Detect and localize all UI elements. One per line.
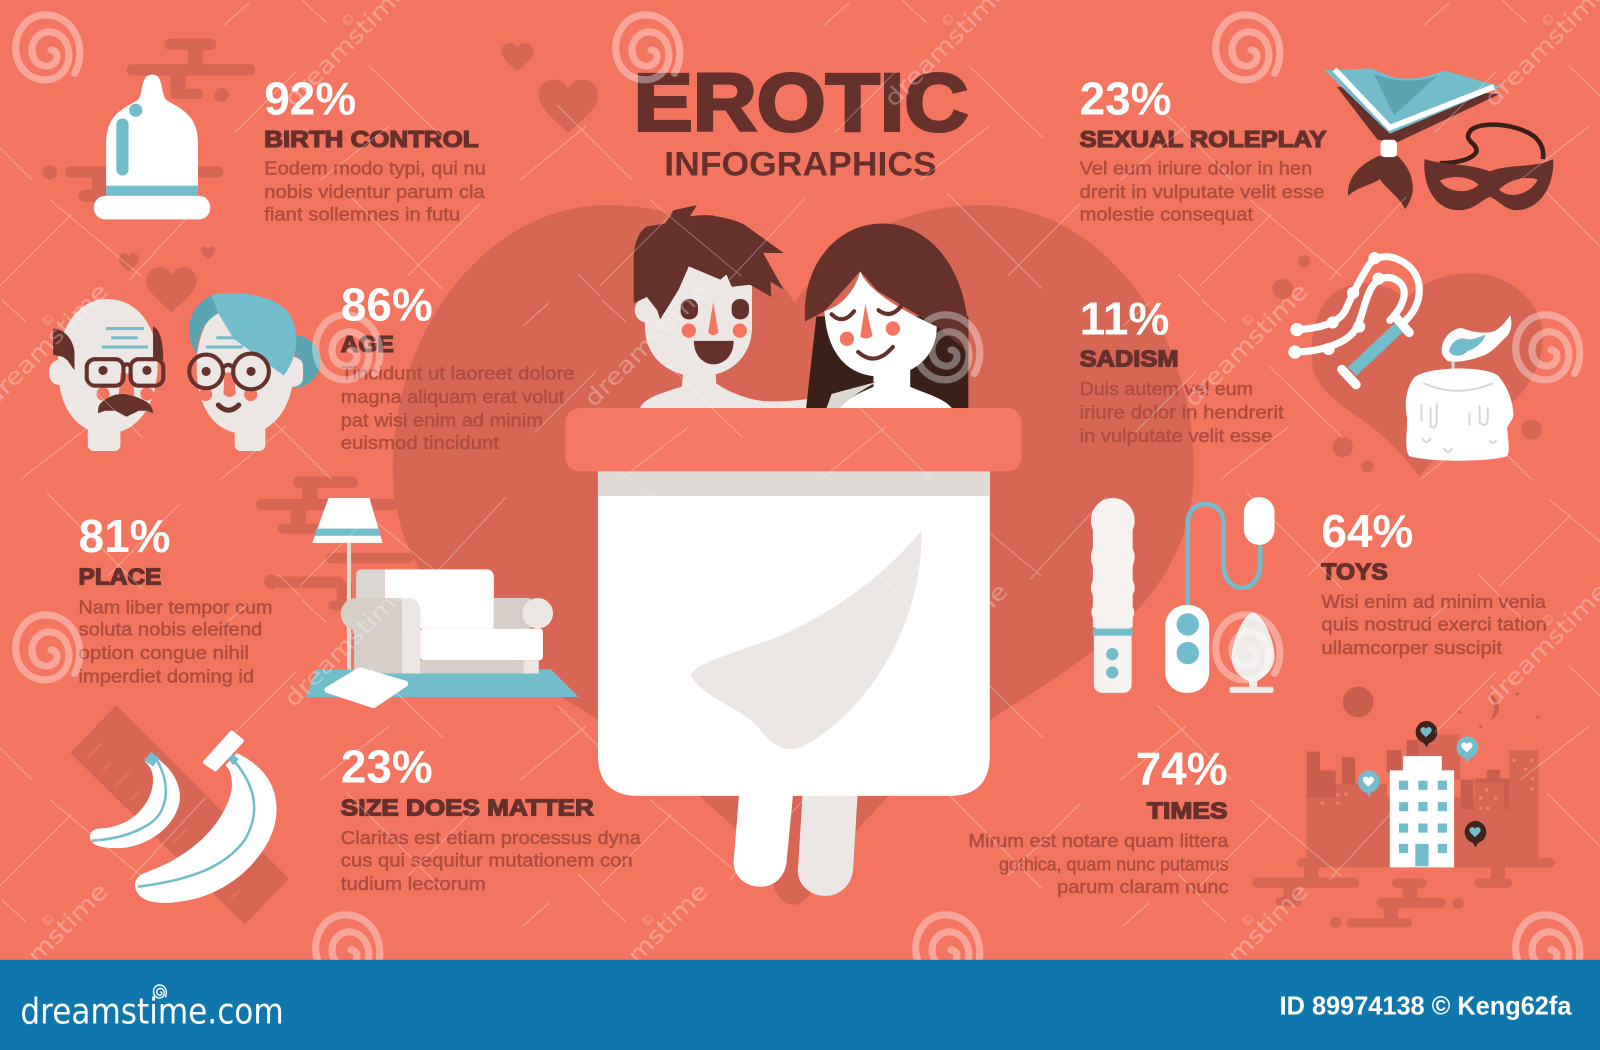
text: toys: TOYS — [1321, 559, 1388, 585]
text: age — [341, 278, 574, 453]
panel: times — [968, 687, 1555, 928]
text: sadism: SADISM — [1080, 345, 1179, 371]
text: sadism: Duis autem vel eum — [1080, 378, 1253, 399]
panel: birth control — [43, 39, 486, 224]
text: birth control — [264, 72, 486, 224]
text: place: imperdiet doming id — [79, 666, 254, 687]
text: toys — [1321, 505, 1547, 658]
watermark text: © — [339, 11, 359, 31]
panel: age — [49, 278, 574, 453]
watermark text: dreamstime — [1178, 877, 1314, 1012]
text: place: soluta nobis eleifend — [79, 619, 262, 640]
text: birth control: BIRTH CONTROL — [264, 126, 479, 152]
blanket — [565, 408, 1021, 796]
footer logo: dreamstime.com — [20, 991, 284, 1032]
text: place: Nam liber tempor cum — [79, 596, 272, 617]
text: sexual roleplay: molestie consequat — [1080, 203, 1254, 224]
text: age: 86% — [341, 278, 433, 330]
text: size does matter: tudium lectorum — [341, 873, 486, 894]
watermark text: © — [639, 911, 659, 931]
text: age: euismod tincidunt — [341, 432, 500, 453]
text: sexual roleplay: 23% — [1080, 72, 1171, 124]
text: birth control: nobis videntur parum cla — [264, 181, 485, 202]
panel: size does matter — [70, 705, 641, 924]
text: place: option congue nihil — [79, 642, 249, 663]
icon: night sky — [1343, 687, 1539, 728]
icon: condom — [43, 39, 255, 219]
text: sadism — [1080, 293, 1284, 446]
watermark text: © — [939, 11, 959, 31]
watermark text: dreamstime — [278, 577, 414, 712]
man — [634, 205, 847, 408]
icon: old man — [49, 299, 163, 451]
text: sexual roleplay: Vel eum iriure dolor in hen — [1080, 157, 1312, 178]
footer banner — [0, 960, 1600, 1050]
text: times: parum claram nunc — [1057, 876, 1229, 897]
text: sexual roleplay: drerit in vulputate velit esse — [1080, 181, 1324, 202]
text: sexual roleplay: SEXUAL ROLEPLAY — [1080, 126, 1327, 152]
text: sadism: iriure dolor in hendrerit — [1080, 401, 1284, 422]
watermark text: dreamstime — [878, 577, 1014, 712]
text: times: Mirum est notare quam littera — [968, 830, 1229, 851]
icon: teardrop toy — [1230, 612, 1275, 693]
text: size does matter: SIZE DOES MATTER — [341, 794, 594, 820]
panel: toys — [1091, 497, 1547, 693]
text: times: TIMES — [1147, 797, 1228, 823]
text: toys: ullamcorper suscipit — [1321, 637, 1503, 658]
watermark text: dreamstime — [1478, 577, 1600, 712]
text: toys: 64% — [1321, 505, 1413, 557]
watermark text: © — [39, 311, 59, 331]
text: birth control: 92% — [264, 72, 356, 124]
title: EROTIC — [634, 58, 968, 149]
panel: sexual roleplay — [1080, 68, 1553, 224]
small floating hearts — [118, 43, 598, 312]
text: sadism: 11% — [1080, 293, 1169, 345]
watermark text: © — [1239, 911, 1259, 931]
watermark text: © — [939, 611, 959, 631]
text: place: 81% — [79, 510, 170, 562]
text: age: pat wisi enim ad minim — [341, 410, 543, 431]
watermark text: © — [39, 911, 59, 931]
text: times: gothica, quam nunc putamus — [999, 853, 1229, 874]
big background heart — [393, 205, 1194, 905]
icon: whip — [1288, 252, 1419, 385]
text: birth control: Eodem modo typi, qui nu — [264, 157, 486, 178]
title — [634, 58, 968, 184]
text: toys: Wisi enim ad minim venia — [1321, 591, 1546, 612]
text: toys: quis nostrud exerci tation — [1321, 614, 1547, 635]
watermark text: © — [1539, 611, 1559, 631]
text: sadism: in vulputate velit esse — [1080, 425, 1272, 446]
icon: scarf — [1324, 68, 1501, 209]
watermark text: © — [639, 311, 659, 331]
panel: place — [79, 477, 579, 705]
text: size does matter: cus qui sequitur mutationem con — [341, 849, 633, 870]
icon: remote with cable — [1165, 497, 1274, 693]
woman — [805, 223, 968, 408]
text: age: Tincidunt ut laoreet dolore — [341, 363, 574, 384]
text: age: AGE — [341, 331, 394, 357]
icon: heart backdrop and dots — [1272, 255, 1543, 477]
footer credit: ID 89974138 © Keng62fa — [1280, 992, 1572, 1020]
text: size does matter: Claritas est etiam processus dyna — [341, 827, 641, 848]
watermark text: dreamstime — [578, 877, 714, 1012]
icon: city with hotel and pins — [1307, 721, 1538, 867]
text: place: PLACE — [79, 564, 161, 590]
watermark text: © — [1539, 11, 1559, 31]
legs — [734, 786, 858, 896]
central couple illustration — [565, 205, 1021, 896]
watermark text: dreamstime — [578, 277, 714, 412]
icon: ruler and bananas — [70, 705, 289, 924]
watermark text: © — [1239, 311, 1259, 331]
watermark text: © — [339, 611, 359, 631]
text: size does matter — [341, 741, 641, 894]
panel: sadism — [1080, 252, 1543, 477]
text: birth control: fiant sollemnes in futu — [264, 203, 460, 224]
icon: old woman — [189, 293, 320, 451]
text: place — [79, 510, 272, 687]
text: times — [968, 743, 1229, 897]
icon: mask — [1424, 125, 1553, 210]
text: age: magna aliquam erat volut — [341, 386, 565, 407]
title: INFOGRAPHICS — [664, 146, 937, 184]
icon: candle — [1406, 315, 1513, 461]
text: times: 74% — [1136, 743, 1228, 795]
text: size does matter: 23% — [341, 741, 433, 793]
icon: ground clouds — [1252, 858, 1555, 928]
icon: lamp and sofa — [256, 477, 579, 705]
watermark text: dreamstime — [1178, 277, 1314, 412]
icon: ribbed toy — [1091, 498, 1135, 693]
text: sexual roleplay — [1080, 72, 1327, 224]
